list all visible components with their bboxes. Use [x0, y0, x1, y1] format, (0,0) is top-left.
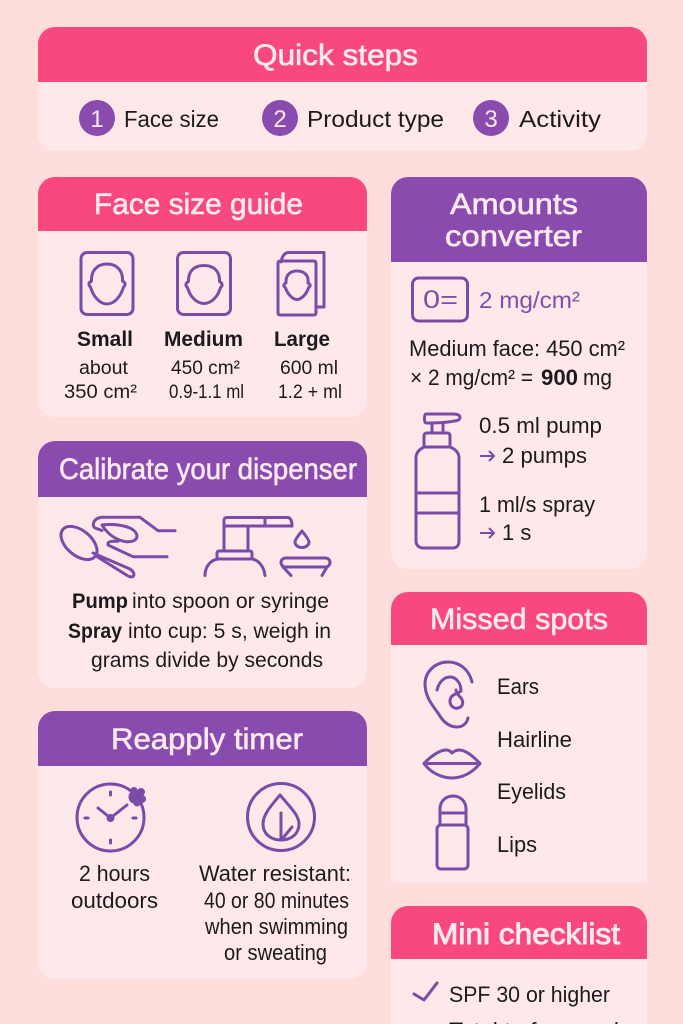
size: medium	[164, 328, 244, 403]
text: checklist items	[449, 982, 619, 1024]
missed spots header	[391, 592, 647, 645]
heading: amounts converter: converter	[445, 220, 582, 253]
panel: quick steps	[38, 27, 647, 151]
text: calibration instructions: grams divide by seconds	[91, 649, 323, 672]
text: water resistant: when swimming	[204, 914, 348, 939]
text: 2 mg/cm²: 2 mg/cm²	[479, 287, 580, 313]
size: large: 600 ml	[280, 357, 338, 379]
mini checklist header	[391, 906, 647, 959]
heading: quick steps: Quick steps	[253, 39, 418, 72]
heading: amounts converter	[445, 188, 582, 253]
list: missed spots: Eyelids	[497, 779, 566, 804]
text: 2 hours outdoors: 2 hours	[79, 861, 150, 886]
text: calibration instructions: into spoon or syringe	[132, 590, 329, 613]
icon: water drop	[248, 784, 314, 850]
icon: large face	[278, 252, 324, 315]
step 1	[79, 100, 219, 136]
text: 2 hours outdoors: outdoors	[71, 888, 158, 913]
text: calibration instructions: Pump	[72, 590, 128, 613]
text: calibration instructions: into cup: 5 s, weigh in	[128, 620, 331, 643]
text: pump dose: 0.5 ml pump	[479, 413, 602, 438]
heading: mini checklist: Mini checklist	[432, 918, 621, 951]
text: pump dose	[479, 413, 602, 468]
step 3	[473, 100, 601, 136]
text: water resistant: Water resistant:	[199, 861, 351, 886]
step 3: 3	[484, 106, 498, 133]
size: medium: Medium	[164, 328, 243, 351]
size: medium: 450 cm²	[171, 357, 240, 379]
text: spray dose: 1 ml/s spray	[479, 492, 595, 517]
size: large	[274, 328, 342, 403]
heading: missed spots: Missed spots	[430, 603, 608, 636]
text: pump dose: 2 pumps	[502, 443, 587, 468]
step 2: 2	[273, 106, 287, 133]
icon: check mark	[414, 983, 437, 1000]
text: medium face formula: 900	[541, 365, 578, 390]
panel: mini checklist	[391, 906, 647, 1024]
icon: hand with spoon	[55, 517, 175, 577]
icon: clock	[77, 784, 146, 851]
step 1: Face size	[124, 106, 219, 132]
heading: amounts converter: Amounts	[450, 188, 578, 221]
size: small: Small	[77, 328, 133, 351]
icon: small face	[81, 252, 133, 314]
list: missed spots	[497, 674, 572, 857]
size: large: Large	[274, 328, 330, 351]
calibrate header	[38, 441, 367, 497]
reapply header	[38, 711, 367, 766]
icon: ratio box: 0=	[423, 286, 458, 314]
size: medium: 0.9-1.1 ml	[169, 381, 244, 403]
heading: calibrate your dispenser: Calibrate your dispenser	[59, 453, 357, 486]
panel: calibrate your dispenser	[38, 441, 367, 688]
text: water resistant: or sweating	[224, 940, 327, 965]
amounts header	[391, 177, 647, 262]
step 1: 1	[90, 106, 104, 133]
icon: pump bottle	[416, 414, 460, 548]
panel: face size guide	[38, 177, 367, 417]
text: medium face formula	[409, 336, 625, 390]
text: spray dose: 1 s	[502, 520, 531, 545]
text: checklist items: SPF 30 or higher	[449, 982, 610, 1007]
size: small: about	[79, 357, 129, 379]
icon: ratio box	[412, 278, 468, 321]
face size header	[38, 177, 367, 231]
text: 2 hours outdoors	[71, 861, 158, 913]
icon: pump with drop and cup	[205, 518, 330, 576]
text: calibration instructions	[68, 590, 331, 672]
step 2: Product type	[307, 106, 444, 132]
step 2	[262, 100, 444, 136]
list: missed spots: Ears	[497, 674, 539, 699]
size: small	[64, 328, 138, 403]
size: small: 350 cm²	[64, 381, 138, 403]
text: water resistant	[199, 861, 351, 965]
icon: ear	[425, 662, 472, 727]
text: water resistant: 40 or 80 minutes	[204, 888, 349, 913]
panel: missed spots	[391, 592, 647, 883]
text: medium face formula: Medium face: 450 cm²	[409, 336, 625, 361]
text: medium face formula: mg	[583, 365, 612, 390]
icon: lips	[424, 750, 480, 778]
icon: medium face	[178, 252, 230, 314]
list: missed spots: Hairline	[497, 727, 572, 752]
list: missed spots: Lips	[497, 832, 537, 857]
panel: amounts converter	[391, 177, 647, 569]
size: large: 1.2 + ml	[278, 381, 342, 403]
panel: reapply timer	[38, 711, 367, 979]
heading: reapply timer: Reapply timer	[111, 723, 303, 756]
text: spray dose	[479, 492, 595, 545]
heading: face size guide: Face size guide	[94, 188, 303, 221]
text: medium face formula: × 2 mg/cm² =	[410, 365, 533, 390]
icon: lip balm	[437, 796, 468, 869]
text: calibration instructions: Spray	[68, 620, 122, 643]
quick steps header	[38, 27, 647, 82]
step 3: Activity	[519, 106, 601, 132]
